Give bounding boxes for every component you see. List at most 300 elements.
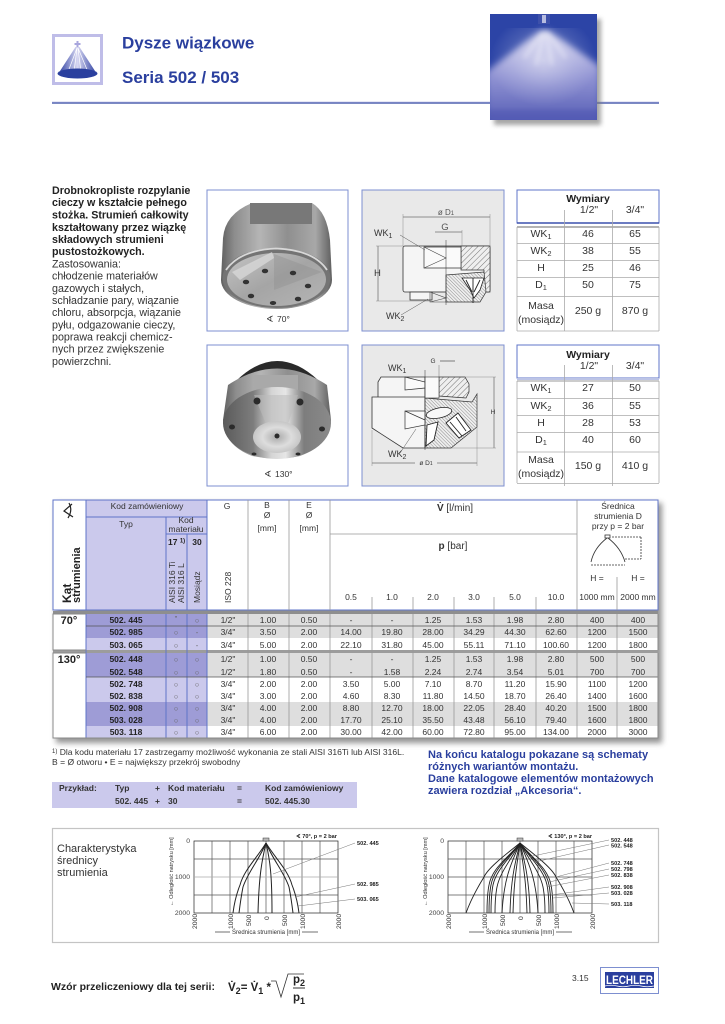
chart: 70 degrees: 502. 445 [357, 841, 379, 847]
panel: dimension drawing 130: ø D1 [419, 460, 433, 467]
intro text: chloru, absorpcja, wiązanie [52, 307, 181, 319]
conversion formula: 2 [236, 986, 241, 996]
row 502.985: 2.00 [301, 627, 318, 637]
intro text: schładzanie pary, wiązanie [52, 295, 179, 307]
main table header: 1000 mm [579, 592, 615, 602]
row 503.028: 1600 [588, 715, 607, 725]
icon: spray cone [52, 34, 103, 85]
table: dimensions 2: D [535, 434, 543, 446]
table: dimensions 2: 60 [629, 434, 641, 446]
table: dimensions 2: 150 g [575, 460, 601, 472]
row 503.028: 35.50 [422, 715, 444, 725]
conversion formula: Wzór przeliczeniowy dla tej serii: [51, 981, 215, 993]
row 502.838: 11.80 [423, 691, 444, 701]
table: dimensions 1: H [537, 262, 545, 274]
chart: 70 degrees: ← Odległość natrysku [mm] [169, 837, 175, 906]
row 502.748: 1200 [629, 679, 648, 689]
main table header: strumienia D [594, 511, 642, 521]
table: dimensions 2: 3/4" [626, 360, 644, 372]
row 503.065: - [196, 641, 199, 650]
example box [52, 782, 357, 808]
table: dimensions 2: 1 [543, 438, 547, 447]
row 503.118: 2.00 [301, 727, 318, 737]
main table body [53, 611, 658, 738]
row 503.065: 55.11 [464, 640, 485, 650]
row 502.985: 502. 985 [109, 627, 143, 637]
row 502.838: 1400 [588, 691, 607, 701]
row 502.985: 62.60 [545, 627, 567, 637]
page number: 3.15 [572, 973, 589, 983]
conversion formula: 1 [258, 986, 263, 996]
table: dimensions 2: 28 [582, 417, 594, 429]
chart: 130 degrees: 2000 [590, 914, 597, 929]
row 502.908: 22.05 [463, 703, 485, 713]
table: dimensions 2: Masa [528, 454, 554, 466]
row 502.445: - [350, 615, 353, 625]
row 502.445: ○ [195, 616, 199, 625]
main table header: AISI 316 L [176, 563, 186, 603]
row 503.028: ○ [174, 716, 178, 725]
chart: 130 degrees: 2000 [446, 914, 453, 929]
main table header: Kąt [60, 584, 74, 603]
table: dimensions 2: 55 [629, 400, 641, 412]
row 503.118: 6.00 [260, 727, 277, 737]
rows backgrounds [53, 614, 658, 738]
row 502.838: 1600 [629, 691, 648, 701]
main table header: H = [590, 573, 604, 583]
row 502.908: 8.80 [343, 703, 360, 713]
panel: dimension drawing 130: G [430, 358, 436, 365]
row 502.908: ○ [195, 704, 199, 713]
table: dimensions 1: D [535, 279, 543, 291]
table: dimensions 1: 46 [629, 262, 641, 274]
main table header: Średnica [601, 500, 635, 511]
table: dimensions 1: 250 g [575, 305, 601, 317]
main table header: 2.0 [427, 592, 439, 602]
row 502.445: 0.50 [301, 615, 318, 625]
intro text: kształtowany przez wiązkę [52, 222, 186, 234]
main table header: V̇ [l/min] [437, 502, 473, 514]
row 502.448: 502. 448 [109, 654, 143, 664]
icon: spray diagram [591, 535, 641, 565]
table: dimensions 2: 50 [629, 382, 641, 394]
chart: 70 degrees: 500 [246, 914, 253, 926]
row 502.838: 502. 838 [109, 691, 143, 701]
row 502.548: 0.50 [301, 667, 318, 677]
chart: 70 degrees: 0 [264, 916, 271, 920]
row 502.445: 1.53 [466, 615, 483, 625]
chart: 130 degrees: 500 [500, 914, 507, 926]
panel: dimension drawing 70 [362, 190, 504, 331]
table: dimensions 2: 36 [582, 400, 594, 412]
logo: Lechler [600, 968, 658, 994]
chart: 130 degrees: Średnica strumienia [mm] [486, 928, 554, 936]
row 503.065: 2.00 [301, 640, 318, 650]
chart: 70 degrees: 2000 [175, 910, 190, 917]
main table header: 1.0 [386, 592, 398, 602]
main table header: 10.0 [548, 592, 565, 602]
row 502.985: 34.29 [463, 627, 485, 637]
row 503.028: 17.70 [340, 715, 362, 725]
row 502.908: 18.00 [422, 703, 444, 713]
row 503.028: 2.00 [301, 715, 318, 725]
table: dimensions 1: 1 [547, 232, 552, 241]
header rule [52, 102, 659, 103]
main table header: E [306, 500, 312, 510]
table: dimensions 1: WK [530, 245, 547, 257]
callout: mounting note: różnych wariantów montażu. [428, 761, 578, 773]
chart: 70 degrees: 502. 985 [357, 882, 379, 888]
table: dimensions 1: 25 [582, 262, 594, 274]
row 502.838: 14.50 [463, 691, 485, 701]
row 503.065: 45.00 [422, 640, 444, 650]
row 502.985: 19.80 [381, 627, 403, 637]
chart: 70 degrees: 1000 [228, 914, 235, 929]
chart: 70 degrees: Średnica strumienia [mm] [232, 928, 300, 936]
table: dimensions 1 [517, 190, 659, 331]
row 503.118: ○ [174, 728, 178, 737]
row 502.908: 28.40 [504, 703, 526, 713]
row 502.548: 1.58 [384, 667, 401, 677]
heading: characteristics: strumienia [57, 867, 109, 879]
row 502.985: 44.30 [504, 627, 526, 637]
example box: = [237, 783, 242, 793]
row 503.065: 1200 [588, 640, 607, 650]
intro text: gazowych i stałych, [52, 283, 144, 295]
panel: dimension drawing 70: H [374, 268, 381, 279]
table: dimensions 1: 55 [629, 245, 641, 257]
row 502.838: 4.60 [343, 691, 360, 701]
row 502.748: 3/4" [221, 679, 235, 689]
main table header: Ø [264, 510, 271, 520]
row 503.028: 1800 [629, 715, 648, 725]
panel: nozzle photo 70 [207, 190, 348, 331]
footnote: 1) [52, 749, 57, 755]
main table header: [mm] [258, 523, 276, 533]
row 502.448: 500 [631, 654, 645, 664]
main table header: 2000 mm [620, 592, 656, 602]
row 502.445: " [175, 614, 178, 623]
main table header: materiału [169, 524, 204, 534]
main table shadow [56, 503, 662, 743]
row 502.448: ○ [174, 655, 178, 664]
example box: Typ [115, 783, 129, 793]
chart: 130 degrees: 502. 448 [611, 838, 633, 844]
table: dimensions 1: 65 [629, 228, 641, 240]
conversion formula: p [293, 992, 300, 1004]
row 503.065 [109, 640, 648, 650]
row 502.985: 3/4" [221, 627, 235, 637]
row 502.445: 400 [631, 615, 645, 625]
example box: 30 [168, 796, 178, 806]
example box: = [237, 796, 242, 806]
main table header: 5.0 [509, 592, 521, 602]
row 502.548: 1.80 [260, 667, 277, 677]
main table header: Typ [119, 519, 133, 529]
table: dimensions 1: 1/2" [580, 204, 598, 216]
table: dimensions 2 [517, 345, 659, 486]
row 502.748: ○ [174, 680, 178, 689]
row 502.448: 1.53 [466, 654, 483, 664]
chart: 70 degrees: 2000 [336, 914, 343, 929]
footnote: B = Ø otworu • E = największy przekrój swobodny [52, 757, 241, 767]
intro text: poprawa reakcji chemicz- [52, 332, 173, 344]
heading: characteristics: Charakterystyka [57, 843, 137, 855]
table: dimensions 2: 40 [582, 434, 594, 446]
row 503.065: 22.10 [340, 640, 362, 650]
row 503.028: 56.10 [504, 715, 526, 725]
row 502.548: 3.54 [507, 667, 524, 677]
table: dimensions 2: 1/2" [580, 360, 598, 372]
row 502.985 [109, 627, 648, 637]
callout: mounting note [428, 749, 654, 797]
row 502.448: 0.50 [301, 654, 318, 664]
main table header: G [224, 501, 230, 511]
row 502.748: ○ [195, 680, 199, 689]
row 503.118 [110, 727, 648, 737]
chart: 130 degrees: 503. 028 [611, 891, 633, 897]
main table header: Kod zamówieniowy [111, 501, 184, 511]
main table header: ISO 228 [223, 572, 233, 603]
row 502.908: 12.70 [381, 703, 403, 713]
panel: dimension drawing 130 [362, 345, 504, 486]
row 503.065: 5.00 [260, 640, 277, 650]
row 502.985: 14.00 [340, 627, 362, 637]
row 502.748: 11.20 [505, 679, 526, 689]
main table header: przy p = 2 bar [592, 521, 644, 531]
main table header: 17 [168, 537, 177, 547]
row 503.028: ○ [195, 716, 199, 725]
row 503.028: 4.00 [260, 715, 277, 725]
panel: dimension drawing 70: WK [374, 228, 388, 238]
row 502.985: 1200 [588, 627, 607, 637]
chart: 130 degrees: ∢ 130°, p = 2 bar [548, 833, 593, 840]
table: dimensions 1: 3/4" [626, 204, 644, 216]
row 502.448: ○ [195, 655, 199, 664]
chart: 130 degrees: 503. 118 [611, 902, 632, 908]
row 503.118: 503. 118 [110, 727, 143, 737]
intro text: pyłu, odgazowanie cieczy, [52, 320, 175, 332]
row 502.548: 700 [631, 667, 645, 677]
intro text: stożka. Strumień całkowity [52, 210, 189, 222]
row 502.445 [109, 614, 645, 625]
main table header: 1) [180, 538, 185, 544]
table: dimensions 2: 27 [582, 382, 594, 394]
example box: Kod materiału [168, 783, 225, 793]
row 503.118: 42.00 [381, 727, 403, 737]
row 503.065: 71.10 [504, 640, 526, 650]
row 503.118: ○ [195, 728, 199, 737]
table: dimensions 2: 1 [547, 386, 552, 395]
row 503.065: 1800 [629, 640, 648, 650]
example box: 502. 445.30 [265, 796, 310, 806]
row 502.838: 8.30 [384, 691, 401, 701]
row 502.838: 3/4" [221, 691, 235, 701]
panel: characteristics [52, 828, 658, 942]
icon: spray angle symbol [64, 503, 73, 518]
row 502.908: 40.20 [545, 703, 567, 713]
conversion formula: p [293, 974, 300, 986]
row 502.748: 2.00 [301, 679, 318, 689]
intro text: nych przez zwiększenie [52, 344, 164, 356]
title: Seria 502 / 503 [122, 68, 239, 87]
row 502.448: 1.25 [425, 654, 442, 664]
row 502.985: - [196, 628, 199, 637]
panel: dimension drawing 70: 2 [400, 316, 404, 323]
table: dimensions 1: (mosiądz) [518, 314, 564, 326]
table: dimensions 2: WK [530, 382, 547, 394]
chart: 70 degrees: 2000 [192, 914, 199, 929]
table: dimensions 1: 870 g [622, 305, 648, 317]
row 502.548 [109, 667, 645, 677]
example box: 502. 445 [115, 796, 148, 806]
conversion formula: 1 [300, 996, 305, 1006]
chart: 70 degrees: 1000 [300, 914, 307, 929]
row 502.448: 1.00 [260, 654, 277, 664]
row 502.445: 1.25 [425, 615, 442, 625]
panel: dimension drawing 70: 1 [388, 233, 392, 240]
table: dimensions 1: 2 [547, 249, 552, 258]
row 503.028: 25.10 [381, 715, 403, 725]
table: dimensions 2: 53 [629, 417, 641, 429]
table: dimensions 2: 410 g [622, 460, 648, 472]
panel: nozzle photo 70: 70° [277, 314, 290, 324]
chart: 70 degrees: 500 [282, 914, 289, 926]
row 502.908 [109, 703, 648, 713]
row 503.028: 43.48 [463, 715, 485, 725]
panel: nozzle photo 70: ∢ [266, 314, 274, 324]
row 502.748: 502. 748 [109, 679, 143, 689]
row 502.748: 7.10 [425, 679, 442, 689]
logo: Lechler: LECHLER [606, 975, 654, 987]
example box: Kod zamówieniowy [265, 783, 344, 793]
panel: dimension drawing 70: G [441, 222, 449, 233]
row 503.118: 72.80 [463, 727, 485, 737]
row 503.118: 30.00 [340, 727, 362, 737]
example box: Przykład: [59, 783, 97, 793]
row 502.548: 2.74 [466, 667, 483, 677]
callout: mounting note: Dane katalogowe elementów montażowych [428, 773, 654, 785]
intro text: Drobnokropliste rozpylanie [52, 185, 190, 197]
chart: 130 degrees: 0 [518, 916, 525, 920]
row 502.985: 28.00 [422, 627, 444, 637]
row 503.065: ○ [174, 641, 178, 650]
chart: 70 degrees: ∢ 70°, p = 2 bar [296, 833, 338, 840]
chart: 130 degrees: 0 [440, 838, 444, 845]
row 502.838: 3.00 [260, 691, 277, 701]
table: dimensions 1: 46 [582, 228, 594, 240]
table: dimensions 2: H [537, 417, 545, 429]
chart: 130 degrees: 502. 548 [611, 844, 633, 850]
chart: 70 degrees: 0 [186, 838, 190, 845]
intro text: składowych strumieni [52, 234, 164, 246]
row 502.838 [109, 691, 648, 701]
row 502.548: 700 [590, 667, 604, 677]
row 503.065: 31.80 [381, 640, 403, 650]
chart: 130 degrees: 502. 748 [611, 861, 633, 867]
main table header: [mm] [300, 523, 318, 533]
row 502.445: 400 [590, 615, 604, 625]
row 503.028: 3/4" [221, 715, 235, 725]
row 502.748 [109, 679, 648, 689]
row 503.118: 134.00 [543, 727, 569, 737]
row 503.028 [109, 715, 648, 725]
example box: + [155, 783, 160, 793]
intro text: chłodzenie materiałów [52, 270, 158, 282]
row 502.448: - [350, 654, 353, 664]
main table header: 0.5 [345, 592, 357, 602]
row 502.985: 3.50 [260, 627, 277, 637]
main table header: 3.0 [468, 592, 480, 602]
heading: characteristics: średnicy [57, 855, 98, 867]
row 502.548: 5.01 [548, 667, 565, 677]
row 502.548: ○ [174, 668, 178, 677]
row 503.118: 3000 [629, 727, 648, 737]
main table body: 70° [61, 615, 77, 627]
conversion formula [51, 974, 305, 1006]
chart: 130 degrees: 502. 838 [611, 873, 633, 879]
row 503.065: 3/4" [221, 640, 235, 650]
row 503.065: 100.60 [543, 640, 569, 650]
table: dimensions 1: 75 [629, 279, 641, 291]
row 502.448: 1.98 [507, 654, 524, 664]
main table header: strumienia [71, 546, 83, 603]
photo: spray [486, 14, 601, 125]
chart: 130 degrees [423, 833, 633, 936]
row 502.548: 2.24 [425, 667, 442, 677]
intro text: Zastosowania: [52, 258, 121, 270]
main table header: H = [631, 573, 645, 583]
table: dimensions 1: 50 [582, 279, 594, 291]
intro text: cieczy w kształcie pełnego [52, 197, 187, 209]
row 502.748: 5.00 [384, 679, 401, 689]
row 503.028: 79.40 [545, 715, 567, 725]
panel: dimension drawing 70: WK [386, 311, 400, 321]
main table body: 130° [58, 654, 80, 666]
row 502.445: 1.00 [260, 615, 277, 625]
row 503.065: 503. 065 [109, 640, 143, 650]
panel: dimension drawing 130: 2 [402, 454, 406, 461]
panel: nozzle photo 130 [207, 345, 348, 486]
row 502.838: ○ [195, 692, 199, 701]
table: dimensions 1: WK [530, 228, 547, 240]
row 502.548: 502. 548 [109, 667, 143, 677]
row 502.748: 1100 [588, 679, 606, 689]
chart: 130 degrees: 500 [536, 914, 543, 926]
callout: mounting note: zawiera rozdział „Akcesoria“. [428, 785, 581, 797]
table: dimensions 2: (mosiądz) [518, 468, 564, 480]
panel: dimension drawing 130: 1 [402, 368, 406, 375]
main table header: Ø [306, 510, 313, 520]
row 502.448: - [391, 654, 394, 664]
example box: + [155, 796, 160, 806]
row 502.748: 3.50 [343, 679, 360, 689]
row 502.445: 1/2" [221, 615, 235, 625]
chart: 130 degrees: 502. 798 [611, 867, 633, 873]
row 502.748: 8.70 [466, 679, 483, 689]
row 502.838: 26.40 [545, 691, 567, 701]
row 502.448: 1/2" [221, 654, 235, 664]
row 502.448: 500 [590, 654, 604, 664]
row 502.908: 3/4" [221, 703, 235, 713]
main table header: B [264, 500, 270, 510]
footnote [52, 747, 404, 767]
main table header: AISI 316 Ti [167, 561, 177, 603]
table: dimensions 2: WK [530, 400, 547, 412]
intro text: pustostożkowych. [52, 246, 145, 258]
main table header: Kod [178, 515, 194, 525]
chart: 70 degrees [169, 833, 379, 936]
